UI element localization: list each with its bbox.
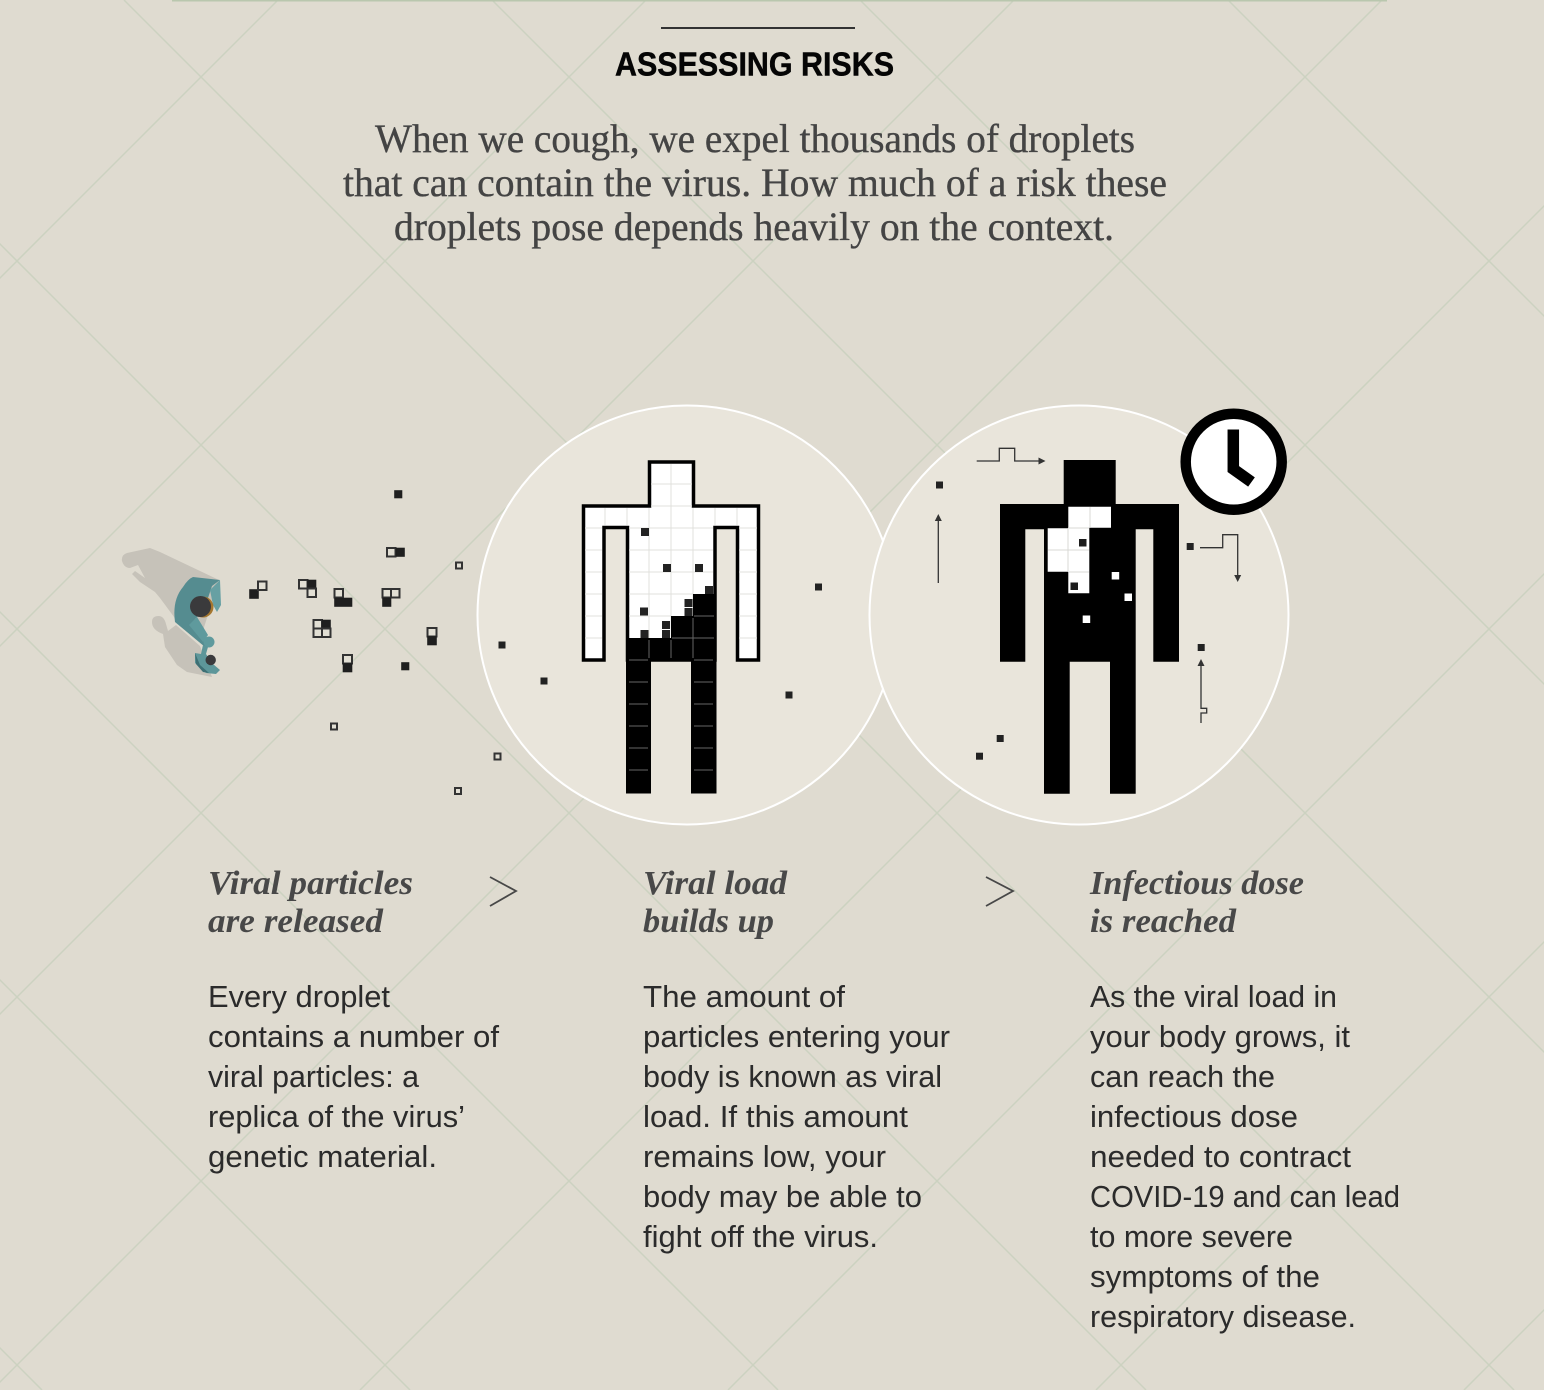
particles around the figure — [936, 482, 1205, 760]
text: infectious dose description: to more severe — [1090, 1219, 1293, 1254]
intro text: droplets pose depends heavily on the context. — [394, 204, 1114, 249]
arrow: chevron one — [490, 877, 516, 906]
column: viral load — [643, 865, 950, 1254]
text: infectious dose description: infectious dose — [1090, 1099, 1298, 1134]
heading: infectious dose: is reached — [1090, 903, 1237, 940]
arrow: chevron two — [986, 877, 1013, 906]
heading: viral particles — [208, 865, 413, 940]
panel: viral load circle — [478, 406, 896, 824]
arrow: deflected path top — [977, 448, 1046, 464]
text: infectious dose description: As the viral load in — [1090, 979, 1337, 1014]
column: infectious dose — [1089, 865, 1400, 1334]
text: viral particles description: viral particles: a — [208, 1059, 420, 1094]
intro text — [343, 116, 1167, 249]
arrow: downward path right — [1200, 535, 1241, 582]
column: viral particles — [208, 865, 499, 1174]
panel: infectious dose circle — [870, 406, 1288, 824]
intro text: When we cough, we expel thousands of droplets — [375, 116, 1135, 161]
arrow: upward path left — [935, 514, 942, 583]
heading: viral load: builds up — [643, 903, 774, 940]
text: viral particles description: replica of the virus’ — [208, 1099, 465, 1134]
heading: viral load — [643, 865, 788, 940]
icon: coughing person seen from above — [122, 548, 221, 677]
header rule — [661, 27, 855, 29]
heading: infectious dose — [1089, 865, 1304, 940]
heading: viral load: Viral load — [643, 865, 788, 902]
heading: viral particles: Viral particles — [208, 865, 413, 902]
icon: clock — [1186, 414, 1282, 510]
text: viral load description — [643, 979, 950, 1254]
text: infectious dose description: COVID-19 and can lead — [1090, 1179, 1400, 1214]
text: viral particles description: Every droplet — [208, 979, 390, 1014]
text: infectious dose description: can reach the — [1090, 1059, 1275, 1094]
viral droplets in the air — [250, 490, 500, 794]
text: infectious dose description: your body grows, it — [1090, 1019, 1350, 1054]
figure: mostly filled body — [1000, 460, 1179, 794]
text: viral load description: particles entering your — [643, 1019, 950, 1054]
heading: infectious dose: Infectious dose — [1089, 865, 1304, 902]
intro text: that can contain the virus. How much of a risk these — [343, 160, 1167, 205]
text: viral load description: fight off the virus. — [643, 1219, 878, 1254]
title: ASSESSING RISKS — [615, 46, 894, 82]
text: viral load description: remains low, your — [643, 1139, 886, 1174]
text: viral particles description — [208, 979, 499, 1174]
heading: viral particles: are released — [208, 903, 384, 940]
text: viral load description: The amount of — [643, 979, 845, 1014]
text: viral load description: body may be able to — [643, 1179, 922, 1214]
particles around the figure — [498, 584, 822, 698]
text: viral particles description: contains a number of — [208, 1019, 499, 1054]
text: infectious dose description: respiratory disease. — [1090, 1299, 1356, 1334]
text: infectious dose description: needed to contract — [1090, 1139, 1351, 1174]
figure: partly filled body — [584, 462, 758, 794]
text: viral particles description: genetic material. — [208, 1139, 437, 1174]
text: viral load description: body is known as viral — [643, 1059, 942, 1094]
text: infectious dose description — [1090, 979, 1400, 1334]
arrow: upward path lower right — [1198, 659, 1207, 723]
text: infectious dose description: symptoms of the — [1090, 1259, 1320, 1294]
text: viral load description: load. If this amount — [643, 1099, 908, 1134]
